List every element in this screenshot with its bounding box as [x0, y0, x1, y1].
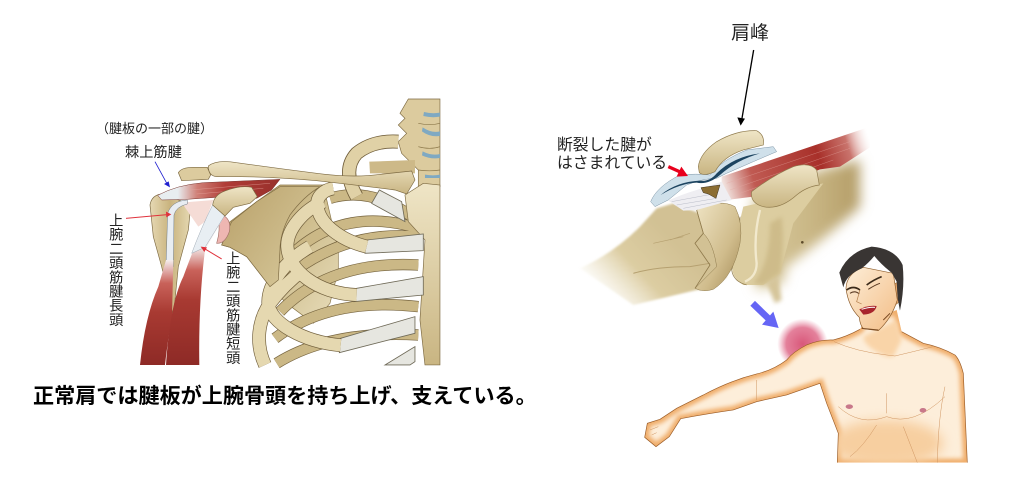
blue pointer: [155, 162, 167, 184]
glenoid and scapular neck: [222, 187, 320, 287]
label: torn tendon is pinched: 断裂した腱が: [557, 137, 652, 154]
joint capsule: [182, 200, 213, 227]
acromion: [698, 131, 764, 174]
coracoid: [751, 165, 819, 207]
scapula body with soft fade: [747, 160, 860, 290]
pain glow: [777, 319, 828, 369]
illustration: normal shoulder skeleton: [126, 99, 440, 365]
red arrow: [668, 167, 682, 173]
blue arrow: [753, 303, 770, 320]
label: acromion: 肩峰: [731, 23, 769, 44]
back ribs: [275, 195, 418, 363]
humeral head: [695, 203, 741, 291]
neck of scapula streak: [767, 277, 782, 303]
biceps short head: [166, 205, 225, 365]
label: torn tendon is pinched: はさまれている: [557, 155, 667, 172]
hair: [839, 247, 903, 311]
face: [846, 267, 897, 331]
muscle: [722, 127, 870, 201]
glenoid and scapular head: [732, 183, 823, 285]
body silhouette with arm: [645, 310, 967, 467]
biceps long head: [140, 260, 173, 365]
acromion: [178, 167, 211, 181]
label: torn tendon is pinched: [557, 136, 667, 172]
red pointer short head: [205, 249, 222, 259]
illustration: man with shoulder pain: [645, 247, 967, 467]
costal cartilages: [339, 190, 423, 365]
label: biceps long head tendon: 上腕二頭筋腱長頭: [107, 213, 123, 327]
label: tendon plate note: （腱板の一部の腱）: [96, 121, 213, 136]
scapula body: [222, 185, 338, 323]
spine: [398, 99, 440, 187]
red pointer long head: [126, 215, 167, 218]
clavicle: [208, 162, 415, 194]
label: supraspinatus tendon: 棘上筋腱: [125, 145, 182, 161]
humerus shaft: [580, 203, 727, 305]
first rib arc behind clavicle: [349, 141, 398, 197]
nipples: [846, 404, 853, 409]
torn tendon: [668, 182, 732, 211]
caption: 正常肩では腱板が上腕骨頭を持ち上げ、支えている。: [33, 385, 537, 408]
coracoid: [213, 187, 257, 216]
ear: [895, 283, 902, 305]
sternum: [405, 183, 440, 365]
long head tendon: [166, 200, 187, 267]
front ribs: [259, 188, 367, 365]
black pointer: [742, 50, 754, 118]
label: biceps short head tendon: 上腕二頭筋腱短頭: [224, 251, 240, 365]
subacromial bursa: [651, 147, 777, 207]
supraspinatus muscle and tendon: [158, 179, 280, 200]
illustration: torn tendon shoulder: [580, 50, 870, 305]
humerus: [150, 194, 190, 317]
